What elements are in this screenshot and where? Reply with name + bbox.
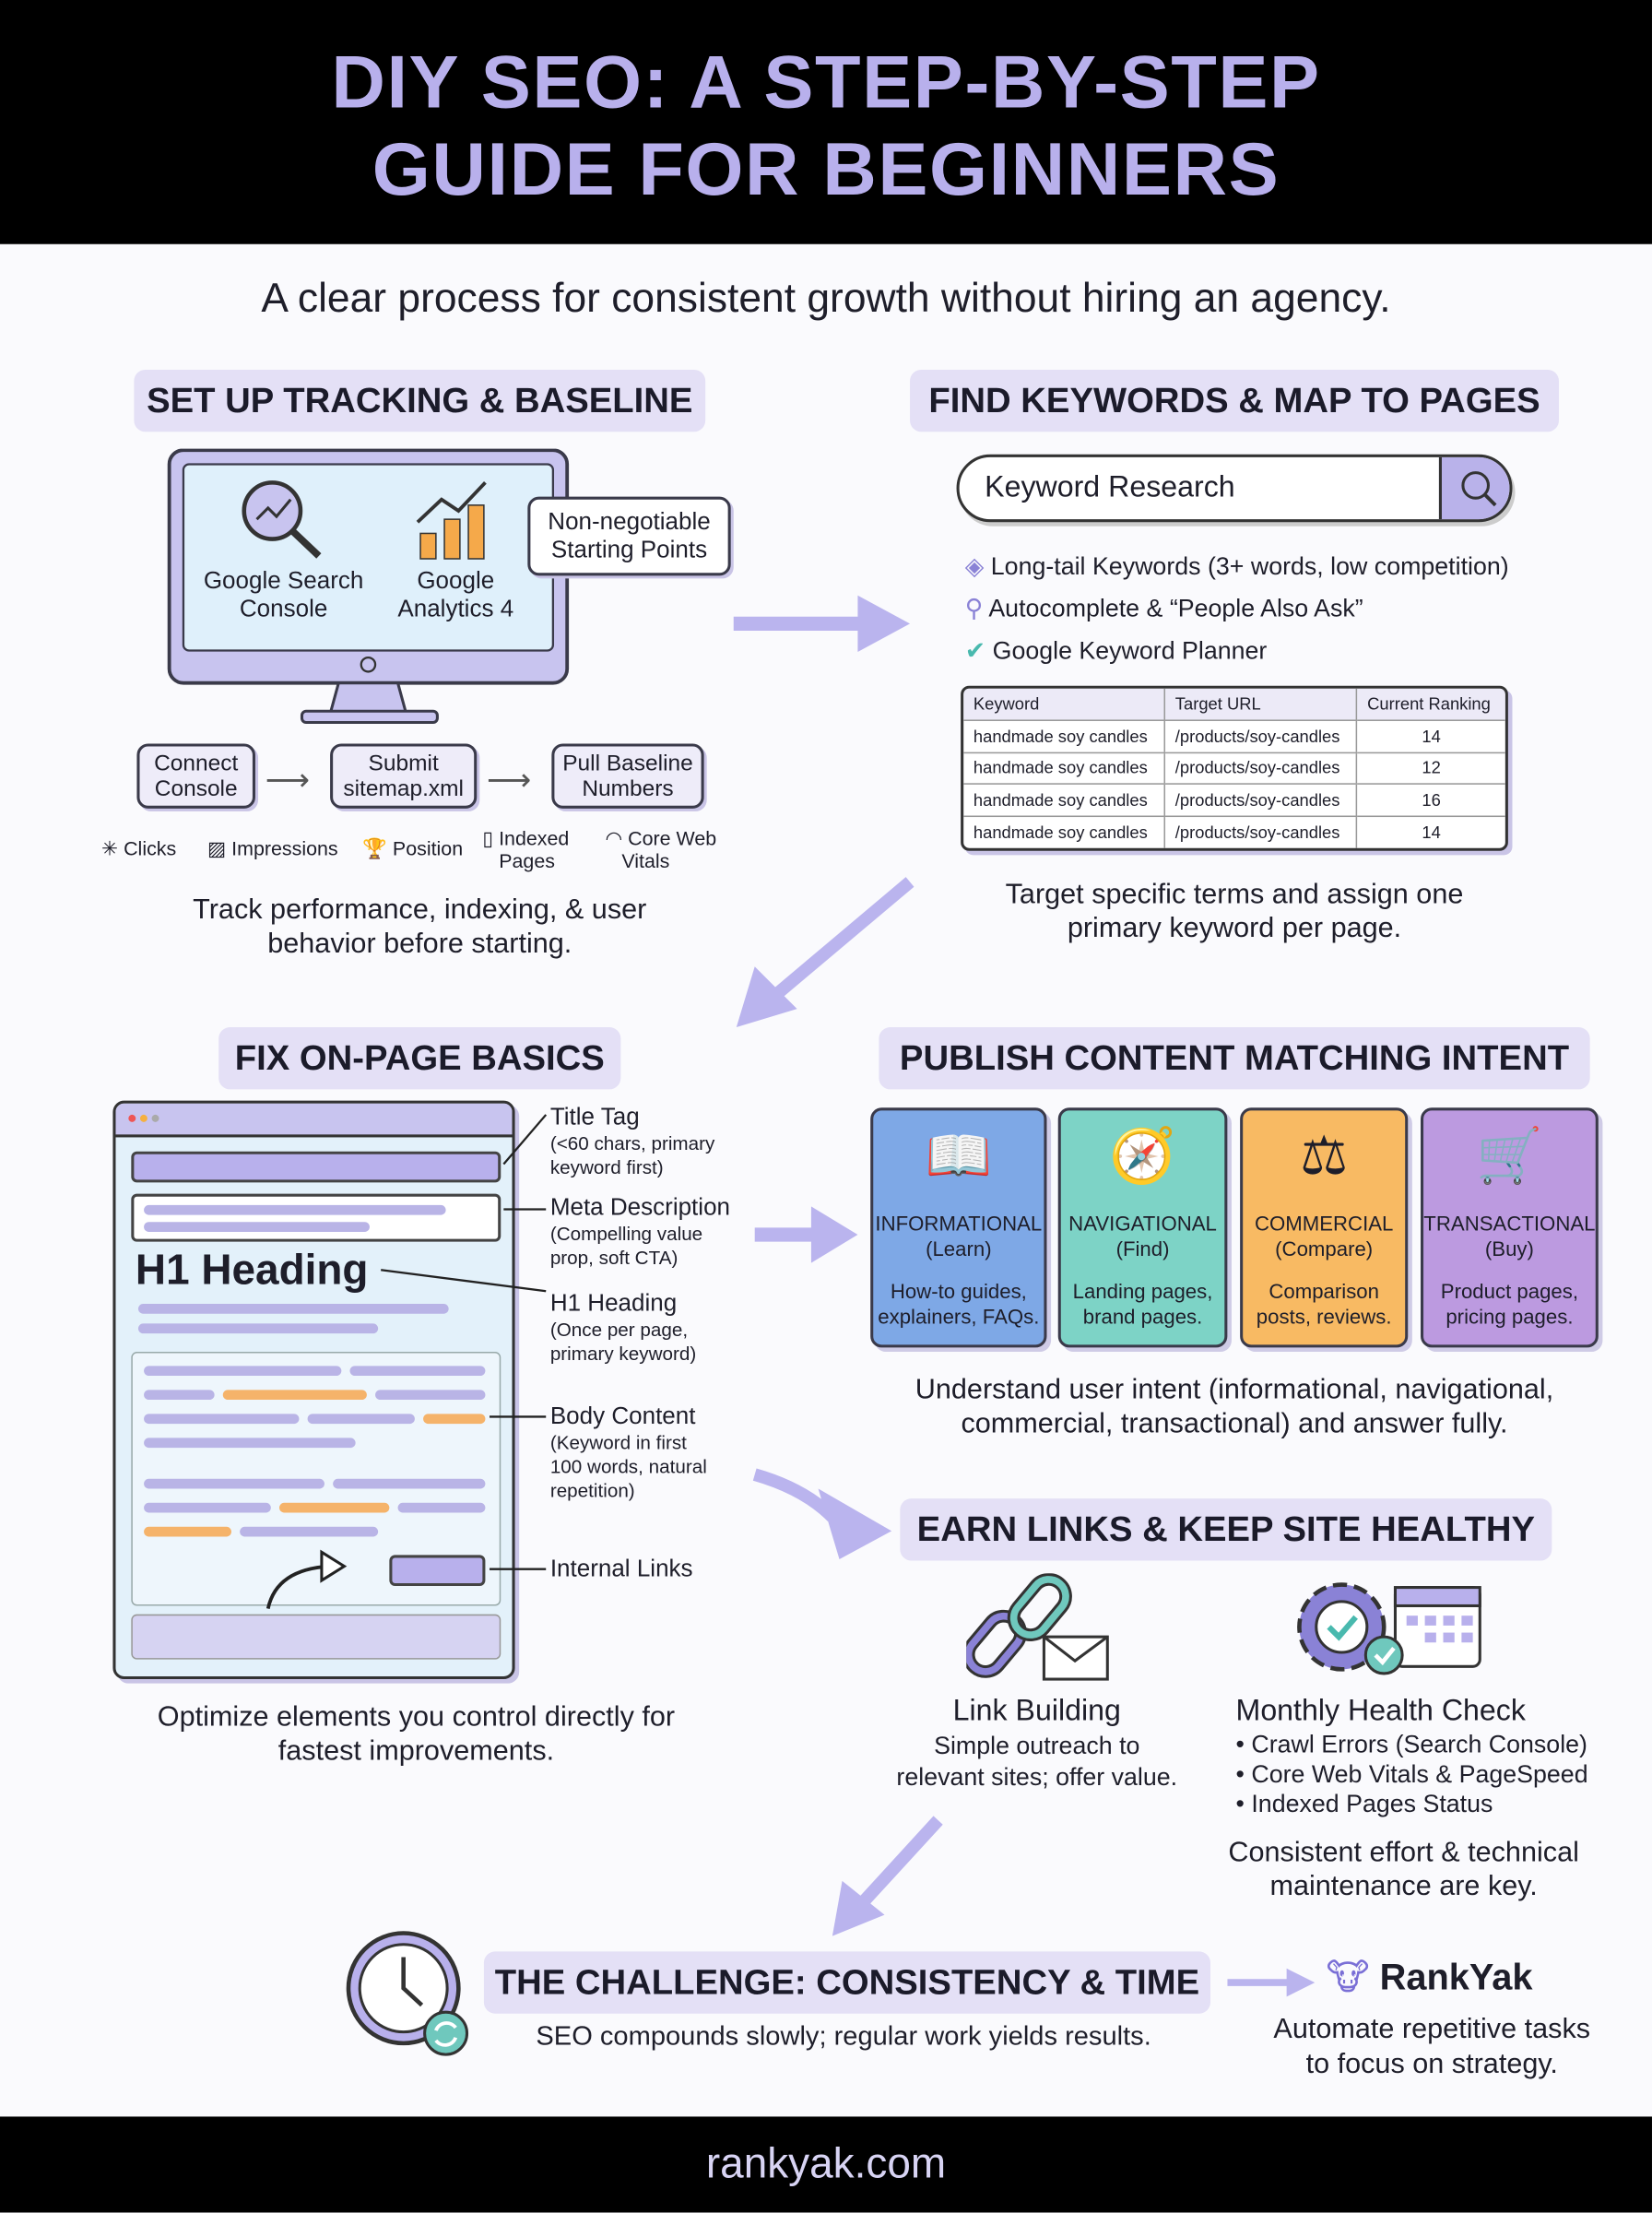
card: navigational: NAVIGATIONAL	[1068, 1213, 1217, 1237]
heading: keywords	[910, 370, 1559, 432]
text: link building: Simple outreach to relevant sites; offer value.	[896, 1732, 1177, 1791]
label: h1: primary keyword)	[550, 1343, 696, 1365]
card: navigational: Landing pages,	[1073, 1282, 1212, 1304]
keyword list	[965, 551, 1509, 665]
keyword table: 16	[1422, 790, 1441, 810]
subtitle: A clear process for consistent growth without hiring an agency.	[261, 277, 1391, 322]
text: health check	[1236, 1695, 1588, 1817]
icon: monitor: Google Analytics 4	[397, 567, 513, 622]
card: informational: 📖	[926, 1128, 992, 1187]
title	[331, 41, 1321, 212]
heading: tracking: SET UP TRACKING & BASELINE	[147, 381, 692, 420]
label: h1: H1 Heading	[550, 1290, 677, 1317]
keyword list: ◈ Long-tail Keywords (3+ words, low competition)	[965, 551, 1509, 580]
browser mockup: ●●●	[127, 1107, 162, 1128]
card: informational	[870, 1107, 1046, 1347]
label: title tag: keyword first)	[550, 1157, 664, 1178]
keyword table: handmade soy candles	[974, 727, 1148, 746]
card: informational: INFORMATIONAL	[875, 1213, 1042, 1237]
keyword table: Current Ranking	[1367, 694, 1491, 714]
flow: baseline	[551, 743, 704, 809]
keyword table	[961, 686, 1508, 851]
browser mockup: H1 Heading	[136, 1248, 368, 1294]
heading: links: EARN LINKS & KEEP SITE HEALTHY	[917, 1509, 1535, 1549]
text: link building: Link Building	[953, 1695, 1121, 1727]
card: commercial: Comparison	[1268, 1282, 1379, 1304]
card: commercial: COMMERCIAL	[1255, 1213, 1393, 1237]
card: navigational: brand pages.	[1083, 1307, 1202, 1330]
keyword table: /products/soy-candles	[1175, 758, 1339, 778]
icon: link chain	[966, 1573, 1109, 1681]
text: challenge: SEO compounds slowly; regular work yields results.	[536, 2022, 1151, 2052]
icon: health check	[1297, 1582, 1481, 1675]
label: body	[550, 1402, 707, 1501]
label: body: 100 words, natural	[550, 1456, 707, 1477]
caption: on-page: Optimize elements you control directly for fastest improvements.	[158, 1702, 675, 1767]
label: meta: Meta Description	[550, 1194, 730, 1221]
keyword list: ⚲ Autocomplete & “People Also Ask”	[965, 594, 1363, 622]
keyword table: 14	[1422, 822, 1441, 842]
flow: baseline: Pull Baseline Numbers	[562, 752, 693, 801]
label: body: Body Content	[550, 1402, 695, 1429]
heading: intent	[879, 1027, 1590, 1089]
heading: on-page	[218, 1027, 620, 1089]
card: transactional: TRANSACTIONAL	[1423, 1213, 1596, 1237]
logo: rankyak: 🐮 RankYak	[1326, 1956, 1533, 1998]
card: commercial: ⚖	[1300, 1128, 1348, 1187]
arrow: ⟶	[266, 762, 310, 798]
title: DIY SEO: A STEP-BY-STEP	[331, 41, 1321, 124]
metrics row: ▨ Impressions	[207, 836, 338, 859]
card: commercial	[1240, 1107, 1408, 1347]
label: h1	[550, 1290, 696, 1365]
card: transactional: Product pages,	[1441, 1282, 1578, 1304]
heading: on-page: FIX ON-PAGE BASICS	[235, 1038, 605, 1078]
keyword table: handmade soy candles	[974, 758, 1148, 778]
text: link building	[896, 1695, 1177, 1791]
caption: keywords: Target specific terms and assign one primary keyword per page.	[1006, 879, 1463, 944]
header banner	[0, 0, 1652, 244]
keyword table: handmade soy candles	[974, 822, 1148, 842]
label: meta: (Compelling value	[550, 1224, 702, 1245]
keyword table: /products/soy-candles	[1175, 822, 1339, 842]
card: informational: explainers, FAQs.	[878, 1307, 1039, 1330]
metrics row: Pages	[499, 849, 555, 872]
arrow down to challenge	[832, 1817, 943, 1936]
label: h1: (Once per page,	[550, 1320, 688, 1341]
text: rankyak: Automate repetitive tasks to focus on strategy.	[1273, 2014, 1590, 2080]
metrics row: 🏆 Position	[362, 836, 463, 859]
label: title tag	[550, 1104, 715, 1178]
metrics row: ▯ Indexed	[482, 827, 569, 849]
caption: links: Consistent effort & technical maintenance are key.	[1228, 1837, 1579, 1902]
browser mockup	[112, 1101, 515, 1679]
card: informational: How-to guides,	[891, 1282, 1027, 1304]
label arrows	[381, 1114, 547, 1570]
flow: connect: Connect Console	[154, 752, 238, 801]
keyword table: 14	[1422, 727, 1441, 746]
keyword list: ✔ Google Keyword Planner	[965, 636, 1267, 665]
card: transactional: (Buy)	[1485, 1239, 1534, 1261]
heading: challenge	[484, 1951, 1210, 2014]
heading: links	[900, 1498, 1552, 1561]
label: body: repetition)	[550, 1480, 635, 1501]
text: health check: • Indexed Pages Status	[1236, 1789, 1493, 1817]
label: internal links: Internal Links	[550, 1555, 693, 1581]
text: health check: Monthly Health Check	[1236, 1695, 1526, 1727]
flow: sitemap	[330, 743, 477, 809]
footer	[0, 2116, 1652, 2213]
footer: rankyak.com	[706, 2140, 946, 2187]
arrow: ⟶	[487, 762, 531, 798]
keyword table: Keyword	[974, 694, 1039, 714]
icon: monitor	[168, 448, 570, 724]
keyword table: /products/soy-candles	[1175, 790, 1339, 810]
heading: tracking	[134, 370, 705, 432]
label: meta: prop, soft CTA)	[550, 1248, 678, 1269]
metrics row: ◠ Core Web	[605, 827, 716, 849]
title: GUIDE FOR BEGINNERS	[372, 128, 1280, 212]
card: navigational: (Find)	[1116, 1239, 1170, 1261]
keyword table: 12	[1422, 758, 1441, 778]
card: commercial: posts, reviews.	[1257, 1307, 1392, 1330]
card: transactional	[1421, 1107, 1599, 1347]
icon: monitor: Google Search Console	[204, 567, 363, 622]
label: body: (Keyword in first	[550, 1432, 687, 1453]
caption: tracking: Track performance, indexing, & user behavior before starting.	[193, 894, 646, 960]
heading: challenge: THE CHALLENGE: CONSISTENCY & TIME	[495, 1963, 1199, 2002]
metrics row: ✳ Clicks	[101, 836, 176, 859]
card: commercial: (Compare)	[1275, 1239, 1373, 1261]
metrics row	[101, 827, 716, 872]
card: transactional: 🛒	[1476, 1128, 1543, 1187]
card: informational: (Learn)	[926, 1239, 992, 1261]
card: transactional: pricing pages.	[1446, 1307, 1573, 1330]
label: title tag: Title Tag	[550, 1104, 640, 1130]
flow: connect	[136, 743, 255, 809]
keyword table: Target URL	[1175, 694, 1261, 714]
label: meta	[550, 1194, 730, 1269]
search bar: Keyword Research	[985, 471, 1235, 503]
heading: intent: PUBLISH CONTENT MATCHING INTENT	[900, 1038, 1569, 1078]
text: health check: • Crawl Errors (Search Console)	[1236, 1730, 1587, 1758]
callout: non-negotiable: Non-negotiable Starting Points	[548, 508, 711, 563]
keyword table: handmade soy candles	[974, 790, 1148, 810]
heading: keywords: FIND KEYWORDS & MAP TO PAGES	[928, 381, 1540, 420]
card: navigational: 🧭	[1109, 1128, 1176, 1187]
search bar	[957, 455, 1512, 522]
icon: clock	[347, 1931, 468, 2056]
caption: intent: Understand user intent (informational, navigational, commercial, transactional) and answer fully.	[915, 1375, 1553, 1439]
metrics row: Vitals	[621, 849, 669, 872]
arrows mid	[752, 1206, 891, 1559]
text: health check: • Core Web Vitals & PageSpeed	[1236, 1759, 1588, 1788]
flow: sitemap: Submit sitemap.xml	[343, 752, 464, 801]
keyword table: /products/soy-candles	[1175, 727, 1339, 746]
label: title tag: (<60 chars, primary	[550, 1133, 714, 1154]
arrow to rankyak	[1228, 1968, 1315, 1997]
arrows between sections	[734, 596, 914, 1027]
callout: non-negotiable	[527, 497, 731, 575]
card: navigational	[1058, 1107, 1227, 1347]
